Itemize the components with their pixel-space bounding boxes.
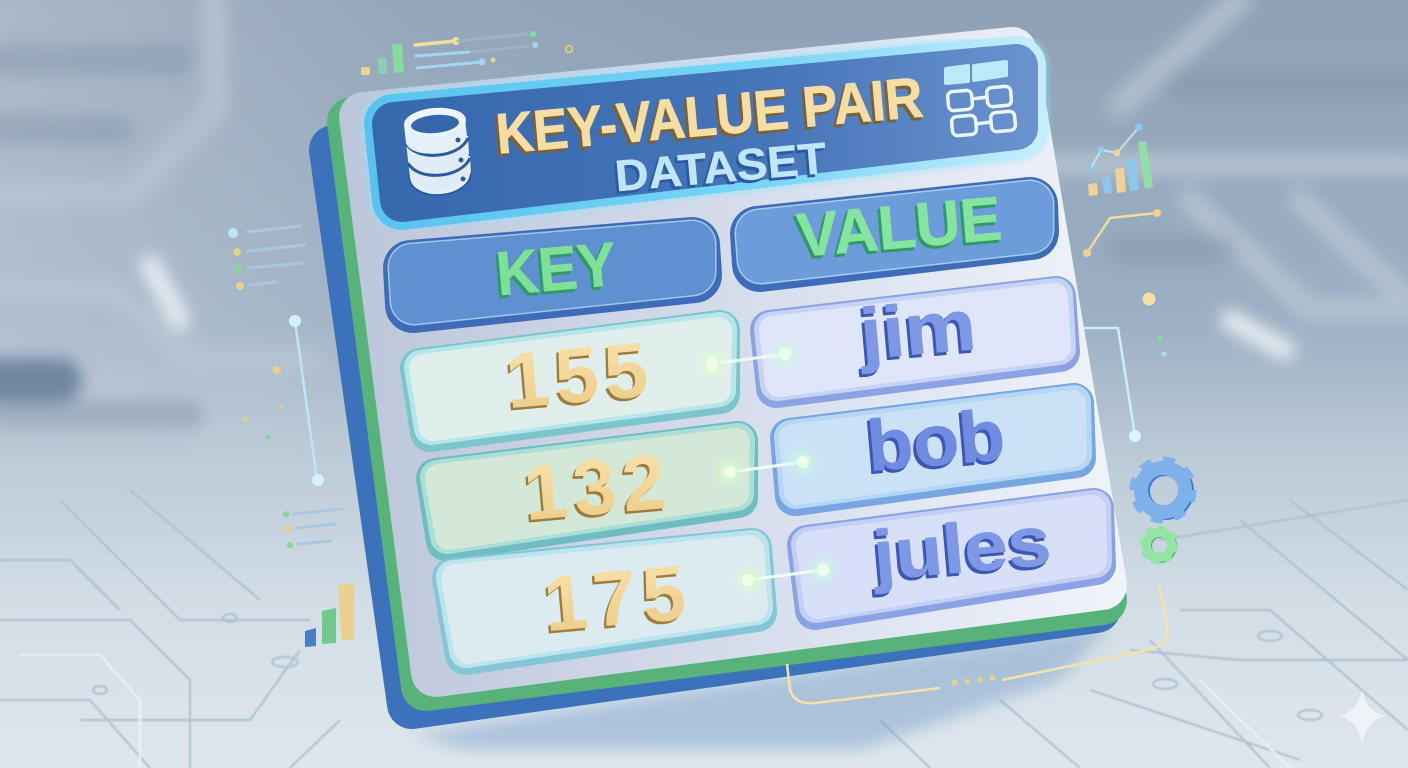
title: DATASET bbox=[611, 137, 826, 204]
value row: jim: jim bbox=[854, 285, 979, 375]
header banner bbox=[394, 66, 1016, 200]
value row: jules: jules bbox=[865, 504, 1052, 598]
value row: bob: bob bbox=[864, 395, 1008, 487]
title: KEY-VALUE PAIR bbox=[491, 68, 923, 169]
key row: 155 bbox=[420, 325, 720, 432]
connector: 132 to bob bbox=[720, 452, 813, 482]
column header: key: KEY bbox=[491, 233, 617, 312]
key row: 175: 175 bbox=[540, 548, 689, 648]
title: KEY-VALUE PAIR bbox=[493, 66, 925, 167]
icon: green gear bbox=[1142, 528, 1176, 562]
icon: blue gear bbox=[1133, 460, 1193, 520]
decoration: top right line and bar chart bbox=[1086, 123, 1153, 196]
column header: value: VALUE bbox=[792, 187, 1002, 274]
decoration: left vertical connector bbox=[242, 315, 324, 486]
icon: sparkle watermark bbox=[1338, 690, 1386, 744]
value row: bob bbox=[790, 395, 1076, 496]
value row: jules: jules bbox=[868, 501, 1054, 595]
decoration: right connector bbox=[1084, 328, 1141, 442]
key row: 175: 175 bbox=[538, 551, 687, 651]
decoration: bottom right gold connector bbox=[787, 585, 1167, 703]
decoration: left text lines bbox=[228, 226, 305, 290]
key row: 132: 132 bbox=[520, 437, 669, 537]
decoration: bottom left bar chart bbox=[305, 583, 354, 647]
decoration: top mini chart and lines bbox=[361, 31, 572, 75]
connector: 155 to jim bbox=[702, 344, 795, 374]
key row: 132 bbox=[436, 437, 738, 541]
decoration: left lower lines bbox=[283, 509, 342, 548]
panel: main dataset card bbox=[334, 52, 1102, 704]
title bbox=[491, 66, 925, 204]
value row: jim bbox=[770, 285, 1060, 388]
column header: value: VALUE bbox=[794, 184, 1004, 271]
icon: table and linked nodes bbox=[946, 62, 1016, 136]
key row: 155: 155 bbox=[502, 325, 651, 425]
connector: 175 to jules bbox=[738, 560, 833, 590]
key row: 155: 155 bbox=[500, 328, 649, 428]
value row: bob: bob bbox=[861, 398, 1006, 490]
value row: jim: jim bbox=[852, 288, 977, 378]
title: DATASET bbox=[613, 134, 829, 201]
decoration: right trend line bbox=[1083, 209, 1166, 356]
card blue back edge bbox=[334, 70, 1096, 704]
card face bbox=[364, 52, 1102, 672]
column header: key bbox=[411, 230, 694, 312]
column header: key: KEY bbox=[493, 230, 619, 309]
key row: 175 bbox=[452, 547, 757, 655]
value row: jules bbox=[807, 501, 1096, 610]
card green edge bbox=[352, 60, 1102, 686]
key row: 132: 132 bbox=[518, 440, 667, 540]
card reflection under the panel bbox=[410, 625, 1110, 750]
icon: database bbox=[403, 105, 473, 198]
